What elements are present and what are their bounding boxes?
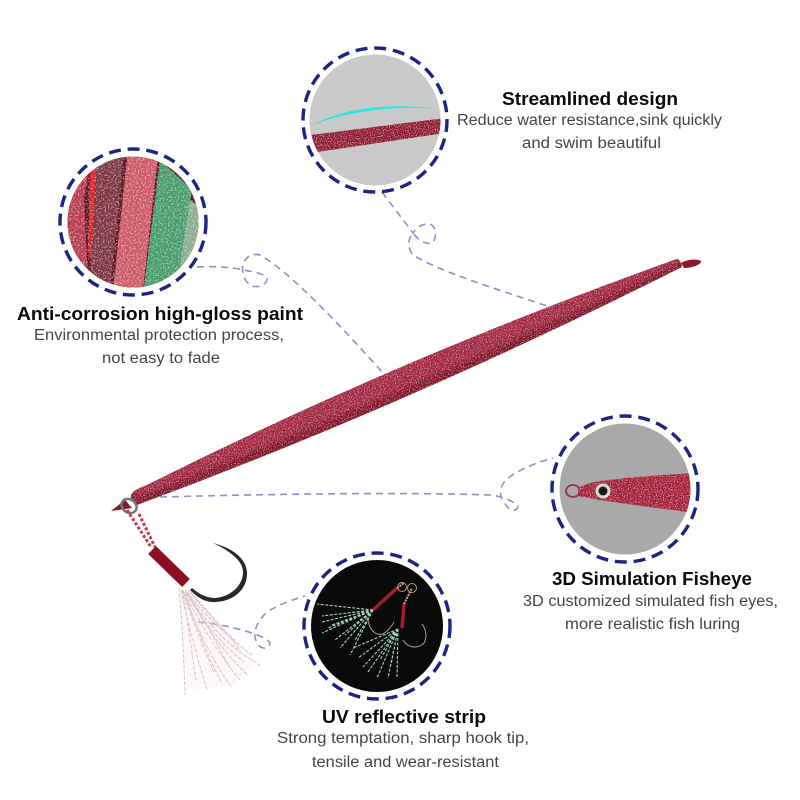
dashed ring [303, 48, 447, 192]
panel: anti-corrosion paint [17, 149, 303, 367]
jig lure body [125, 255, 701, 510]
lure body shape [131, 259, 682, 505]
description: tensile and wear-resistant [312, 754, 500, 771]
lure highlight and glitter [125, 255, 690, 510]
black hook [190, 543, 247, 602]
photo: glitter paint colours [68, 156, 198, 288]
reflective feather tail [179, 588, 260, 695]
connector: streamlined design to lure [382, 192, 550, 307]
heading: 3D Simulation Fisheye [552, 569, 752, 589]
description: more realistic fish luring [565, 616, 740, 633]
connector: paint to lure [197, 254, 383, 373]
description: not easy to fade [102, 350, 220, 367]
description: 3D customized simulated fish eyes, [523, 593, 778, 610]
braided assist loop [127, 510, 155, 547]
cyan water flow arc [313, 106, 436, 125]
fish eye [596, 484, 610, 498]
split ring and head tip [111, 496, 139, 516]
description: Environmental protection process, [34, 327, 284, 344]
heading: Anti-corrosion high-gloss paint [17, 304, 303, 324]
photo: glowing assist hooks on black [311, 560, 443, 692]
connector: UV strip to feather [198, 596, 305, 648]
description: Reduce water resistance,sink quickly [457, 112, 722, 129]
photo: lure head with eye [560, 424, 690, 554]
panel: UV reflective strip [277, 553, 529, 771]
red sleeve [152, 550, 186, 583]
hook assembly [111, 496, 260, 695]
description [34, 327, 284, 367]
connector: fisheye to lure [160, 458, 553, 510]
heading: Streamlined design [502, 89, 678, 109]
lure tail eyelet [681, 260, 701, 268]
dashed ring [60, 149, 206, 295]
dashed ring [304, 553, 450, 699]
description: Strong temptation, sharp hook tip, [277, 730, 529, 747]
description: and swim beautiful [522, 135, 661, 152]
description [457, 112, 722, 152]
heading: UV reflective strip [322, 707, 486, 727]
panel: 3D fisheye [523, 416, 778, 633]
dashed ring [552, 416, 698, 562]
photo: lure on grey background [310, 54, 440, 186]
description [277, 730, 529, 771]
description [523, 593, 778, 633]
panel: streamlined design [303, 48, 722, 192]
